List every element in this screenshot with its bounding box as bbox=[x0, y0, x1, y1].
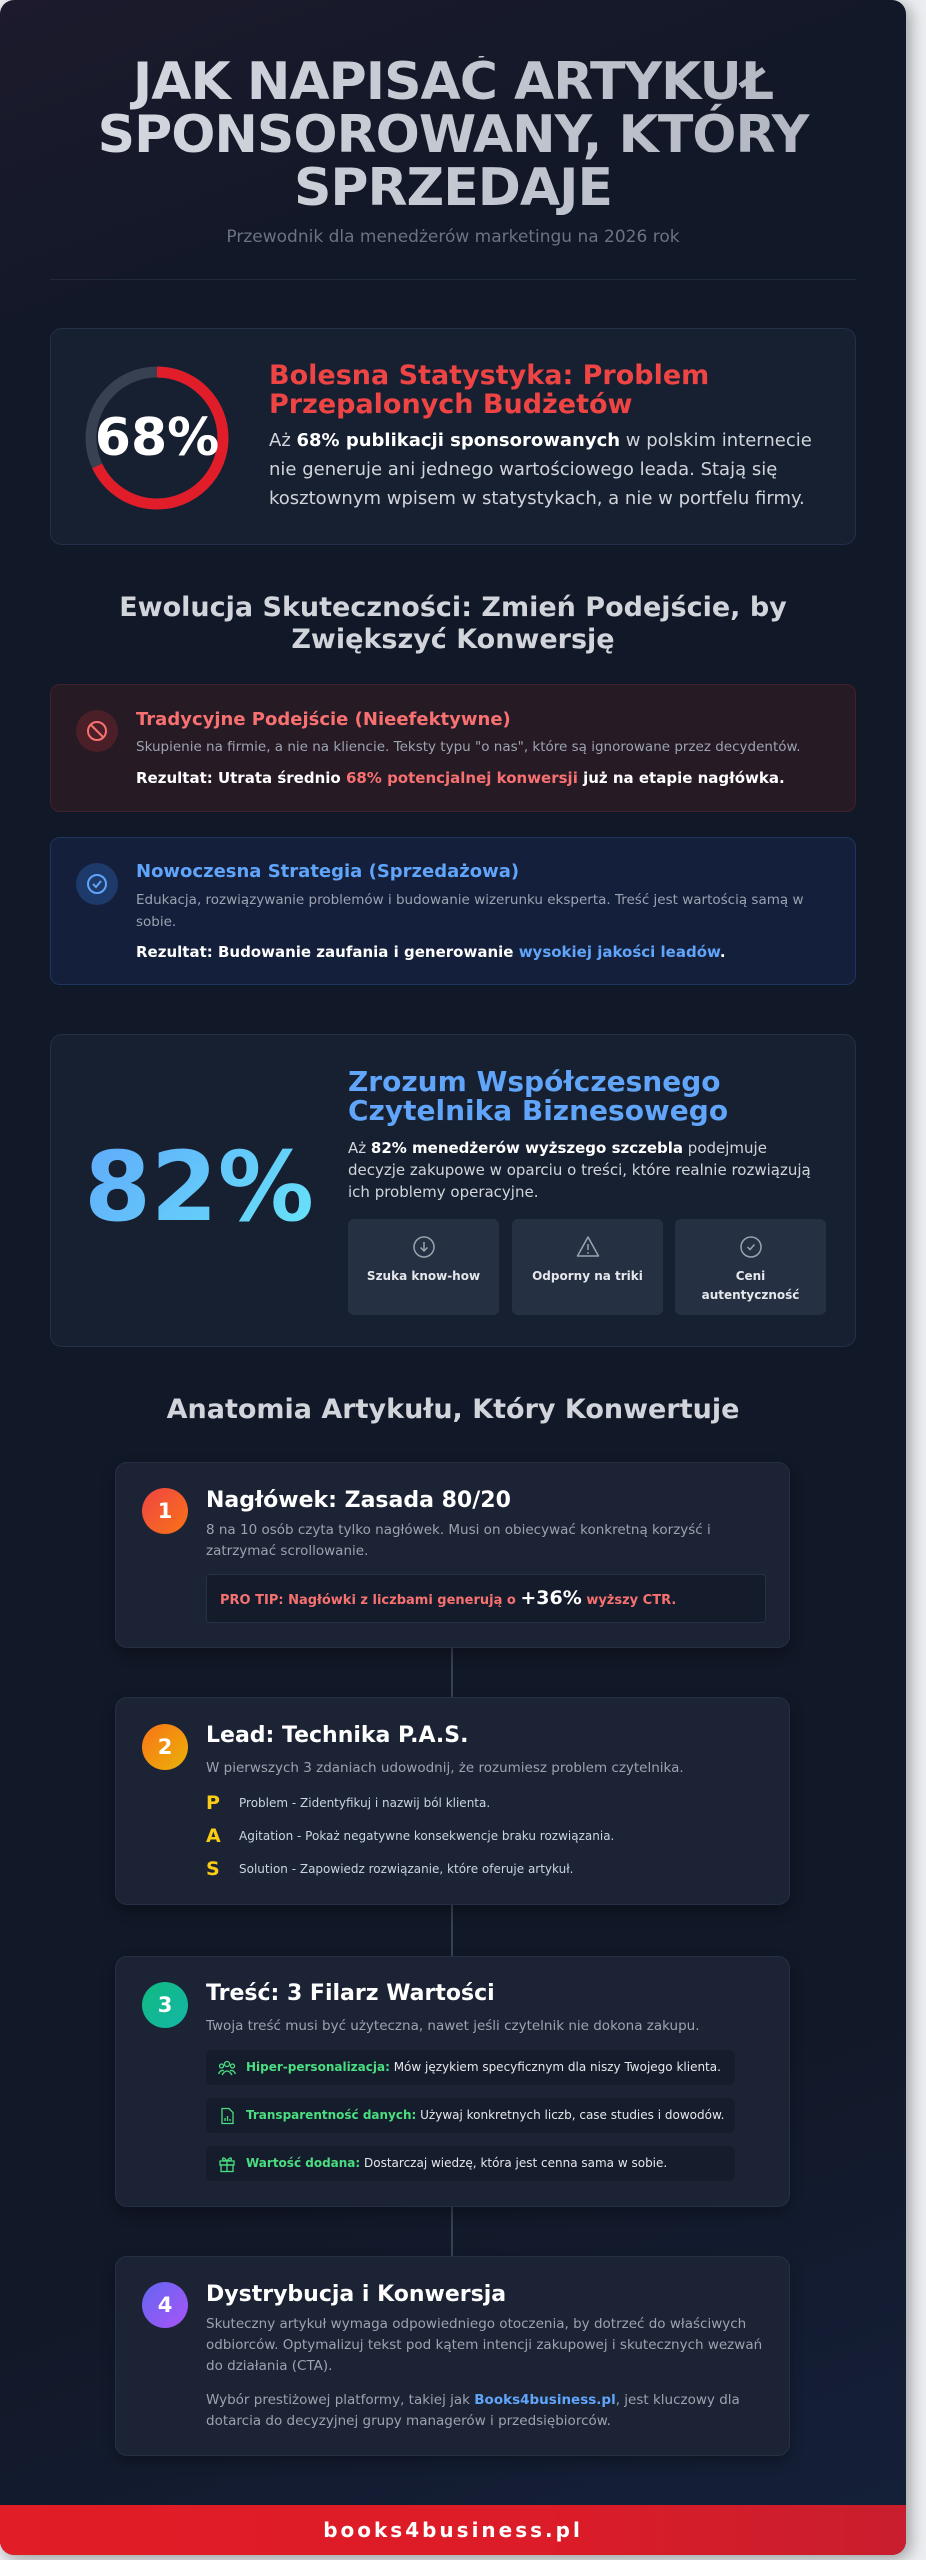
heading: Ewolucja: Ewolucja Skuteczności: Zmień Podejście, by bbox=[119, 592, 787, 623]
footer: books4business.pl bbox=[323, 2518, 583, 2542]
icon: prohibited bbox=[76, 710, 118, 752]
title: SPONSOROWANY, KTÓRY bbox=[98, 105, 808, 165]
heading: Bolesna Statystyka bbox=[269, 360, 709, 420]
result: Rezultat: Budowanie zaufania i generowanie wysokiej jakości leadów. bbox=[136, 943, 726, 961]
step 1: headline: 8 na 10 osób czyta tylko nagłówek. Musi on obiecywać konkretną korzyść i bbox=[206, 1522, 711, 1538]
step 4: distribution bbox=[115, 2256, 790, 2456]
card title: Nowoczesna Strategia (Sprzedażowa) bbox=[136, 861, 519, 882]
title bbox=[0, 56, 906, 215]
heading: Ewolucja bbox=[119, 592, 787, 655]
title: SPRZEDAJE bbox=[294, 158, 612, 218]
item: added value: Wartość dodana: Dostarczaj wiedzę, która jest cenna sama w sobie. bbox=[246, 2156, 667, 2170]
heading: Bolesna Statystyka: Bolesna Statystyka: Problem bbox=[269, 360, 709, 391]
step 2: lead PAS: 2 bbox=[158, 1735, 172, 1759]
heading: Czytelnika Biznesowego bbox=[348, 1094, 728, 1127]
text block: decyzje zakupowe w oparciu o treści, które realnie rozwiązują bbox=[348, 1161, 811, 1179]
heading: Anatomia: Anatomia Artykułu, Który Konwertuje bbox=[167, 1394, 739, 1425]
panel: painful statistic bbox=[50, 328, 856, 545]
PAS list bbox=[206, 1792, 614, 1880]
text block: Aż 68% publikacji sponsorowanych w polskim internecie bbox=[269, 430, 812, 451]
step 4: distribution: do działania (CTA). bbox=[206, 2358, 332, 2374]
callout: pro tip bbox=[206, 1574, 766, 1623]
step 1: headline: zatrzymać scrollowanie. bbox=[206, 1543, 368, 1559]
step 1: headline: Nagłówek: Zasada 80/20 bbox=[206, 1488, 511, 1513]
heading: Zrozum Współczesnego bbox=[348, 1065, 720, 1098]
text block bbox=[269, 430, 812, 509]
step 4: distribution: Wybór prestiżowej platformy, takiej jak Books4business.pl, jest kluczowy dla bbox=[206, 2392, 740, 2408]
step 3: content pillars: 3 bbox=[158, 1993, 172, 2017]
item: data transparency: Transparentność danych: Używaj konkretnych liczb, case studies i dowodów. bbox=[246, 2108, 724, 2122]
text block: kosztownym wpisem w statystykach, a nie w portfelu firmy. bbox=[269, 488, 805, 509]
mini card: know-how: Szuka know-how bbox=[367, 1269, 480, 1283]
subtitle: Przewodnik dla menedżerów marketingu na 2026 rok bbox=[226, 227, 680, 247]
heading bbox=[348, 1065, 728, 1127]
step 4: distribution: 4 bbox=[158, 2293, 172, 2317]
PAS list: Solution - Zapowiedz rozwiązanie, które oferuje artykuł. bbox=[239, 1862, 573, 1876]
step 4: distribution: odbiorców. Optymalizuj tekst pod kątem intencji zakupowej i skutecznych wezwań bbox=[206, 2337, 762, 2353]
step 2: lead PAS: Lead: Technika P.A.S. bbox=[206, 1723, 468, 1748]
footer bbox=[0, 2505, 906, 2555]
step 2: lead PAS: W pierwszych 3 zdaniach udowodnij, że rozumiesz problem czytelnika. bbox=[206, 1760, 684, 1776]
step 3: content pillars: Treść: 3 Filarz Wartości bbox=[206, 1981, 495, 2006]
big stat 82%: 82% bbox=[84, 1131, 314, 1243]
item: data transparency bbox=[206, 2098, 735, 2133]
PAS list: Problem - Zidentyfikuj i nazwij ból klienta. bbox=[239, 1796, 490, 1810]
item: personalization bbox=[206, 2050, 735, 2085]
card text: Skupienie na firmie, a nie na kliencie. Teksty typu "o nas", które są ignorowane przez decydentów. bbox=[136, 739, 801, 755]
icon: check bbox=[76, 863, 118, 905]
mini card: resistant: Odporny na triki bbox=[532, 1269, 643, 1283]
step 3: content pillars: Twoja treść musi być użyteczna, nawet jeśli czytelnik nie dokona zakupu. bbox=[206, 2018, 700, 2034]
result: Rezultat: Utrata średnio 68% potencjalnej konwersji już na etapie nagłówka. bbox=[136, 769, 785, 787]
heading: Ewolucja: Zwiększyć Konwersję bbox=[291, 624, 615, 655]
step 2: lead PAS bbox=[115, 1697, 790, 1905]
card text: Edukacja, rozwiązywanie problemów i budowanie wizerunku eksperta. Treść jest wartością samą w bbox=[136, 892, 803, 908]
title: JAK NAPISAĆ ARTYKUŁ bbox=[133, 52, 773, 112]
PAS list: S bbox=[206, 1858, 220, 1880]
mini card: resistant bbox=[512, 1219, 663, 1315]
card text: sobie. bbox=[136, 914, 176, 930]
step 1: headline: 1 bbox=[158, 1499, 172, 1523]
donut chart 68% bbox=[86, 366, 228, 510]
item: added value bbox=[206, 2146, 735, 2181]
item: personalization: Hiper-personalizacja: Mów językiem specyficznym dla niszy Twojego klienta. bbox=[246, 2060, 721, 2074]
callout: pro tip: PRO TIP: Nagłówki z liczbami generują o +36% wyższy CTR. bbox=[220, 1587, 676, 1609]
PAS list: Agitation - Pokaż negatywne konsekwencje braku rozwiązania. bbox=[239, 1829, 614, 1843]
card title: Tradycyjne Podejście (Nieefektywne) bbox=[136, 709, 511, 730]
step 4: distribution: Skuteczny artykuł wymaga odpowiedniego otoczenia, by dotrzeć do właściwych bbox=[206, 2316, 746, 2332]
PAS list: P bbox=[206, 1792, 220, 1814]
text block: Aż 82% menedżerów wyższego szczebla podejmuje bbox=[348, 1139, 767, 1157]
PAS list: A bbox=[206, 1825, 221, 1847]
mini card: authenticity: Ceni bbox=[736, 1269, 765, 1283]
mini card: authenticity: autentyczność bbox=[702, 1288, 799, 1302]
panel: modern strategy bbox=[50, 837, 856, 985]
text block bbox=[348, 1139, 811, 1201]
step 4: distribution: dotarcia do decyzyjnej grupy managerów i przedsiębiorców. bbox=[206, 2413, 611, 2429]
panel: modern business reader bbox=[50, 1034, 856, 1347]
step 3: content pillars bbox=[115, 1956, 790, 2207]
donut chart 68%: 68% bbox=[95, 408, 219, 468]
step 4: distribution: Dystrybucja i Konwersja bbox=[206, 2282, 506, 2307]
mini card: authenticity bbox=[675, 1219, 826, 1315]
text block: ich problemy operacyjne. bbox=[348, 1183, 538, 1201]
panel: traditional approach bbox=[50, 684, 856, 812]
heading: Bolesna Statystyka: Przepalonych Budżetów bbox=[269, 389, 632, 420]
card text bbox=[136, 892, 803, 930]
step 1: headline bbox=[115, 1462, 790, 1648]
text block: nie generuje ani jednego wartościowego leada. Stają się bbox=[269, 459, 777, 480]
mini card: know-how bbox=[348, 1219, 499, 1315]
